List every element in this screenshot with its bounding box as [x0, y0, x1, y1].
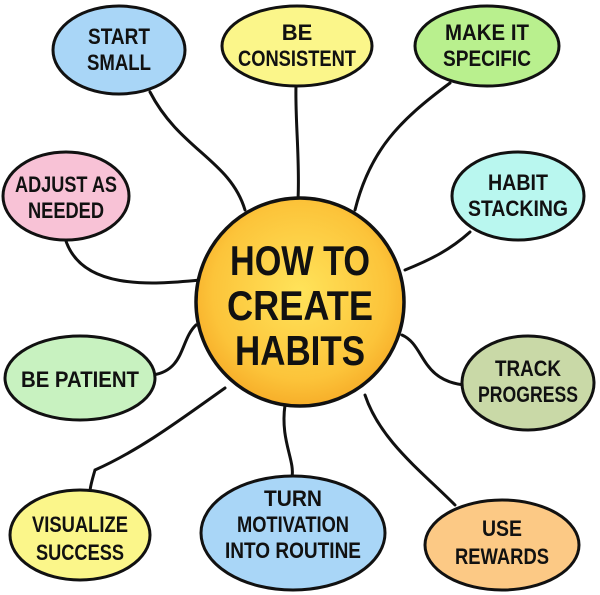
- bubble: be consistent: CONSISTENT: [238, 46, 356, 71]
- center: How to create habits: HABITS: [235, 327, 365, 374]
- bubble: adjust as needed: NEEDED: [28, 198, 104, 223]
- bubble: make it specific: [415, 6, 559, 86]
- bubble: turn motivation into routine: INTO ROUTINE: [225, 538, 361, 563]
- bubble: make it specific: SPECIFIC: [443, 46, 531, 71]
- bubble: visualize success: VISUALIZE: [32, 512, 128, 537]
- bubble: adjust as needed: [3, 152, 129, 240]
- bubble: use rewards: USE: [482, 516, 522, 541]
- bubble: turn motivation into routine: MOTIVATION: [237, 512, 349, 537]
- bubble: start small: [53, 6, 185, 94]
- bubble: adjust as needed: ADJUST AS: [15, 172, 117, 197]
- bubble: turn motivation into routine: [201, 476, 385, 590]
- bubble: be patient: BE PATIENT: [21, 367, 140, 392]
- connectors: [65, 83, 470, 505]
- bubble: turn motivation into routine: TURN: [264, 486, 322, 511]
- bubble: track progress: TRACK: [495, 356, 561, 381]
- bubble: habit stacking: [452, 152, 584, 240]
- bubble: be patient: [5, 336, 155, 420]
- bubble: habit stacking: HABIT: [488, 170, 548, 195]
- bubble: visualize success: SUCCESS: [36, 540, 124, 565]
- bubble: track progress: PROGRESS: [478, 382, 578, 407]
- bubble: start small: SMALL: [87, 50, 151, 75]
- bubble: visualize success: [10, 490, 150, 580]
- bubble: habit stacking: STACKING: [468, 196, 568, 221]
- center: How to create habits: [196, 198, 404, 406]
- bubble: be consistent: BE: [282, 20, 312, 45]
- center: How to create habits: HOW TO: [230, 237, 370, 284]
- bubble: be consistent: [222, 6, 372, 86]
- bubble: start small: START: [88, 24, 150, 49]
- bubble: make it specific: MAKE IT: [445, 20, 530, 45]
- bubble: track progress: [462, 336, 594, 430]
- bubble: use rewards: REWARDS: [455, 544, 549, 569]
- center: How to create habits: CREATE: [227, 282, 373, 329]
- bubble: use rewards: [425, 500, 579, 590]
